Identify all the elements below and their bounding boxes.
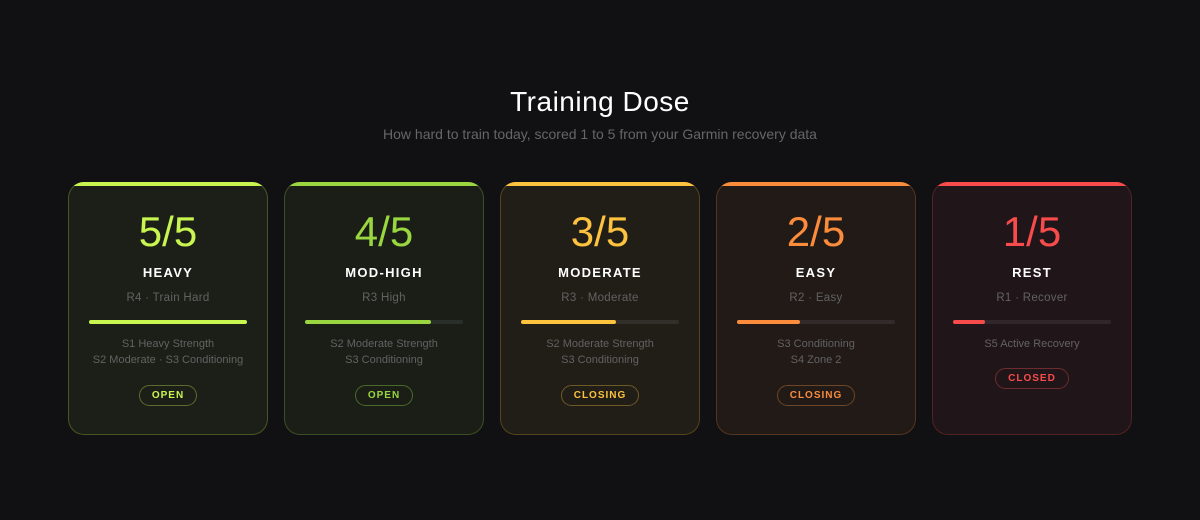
level: moderate: MODERATE bbox=[558, 265, 642, 280]
status pill: closing: CLOSING bbox=[790, 390, 842, 401]
accent bar: easy bbox=[716, 182, 916, 186]
panel: 1/5 rest bbox=[932, 182, 1132, 435]
subtitle: How hard to train today, scored 1 to 5 from your Garmin recovery data bbox=[383, 126, 817, 142]
status pill: closing: CLOSING bbox=[574, 390, 626, 401]
progress bar: 40% bbox=[737, 320, 895, 324]
score: 4/5: 4/5 bbox=[355, 208, 413, 255]
accent bar: heavy bbox=[68, 182, 268, 186]
score: 1/5: 1/5 bbox=[1003, 208, 1061, 255]
sessions: mod-high: S3 Conditioning bbox=[345, 354, 423, 366]
progress bar: 20% bbox=[953, 320, 1111, 324]
level: mod-high: MOD-HIGH bbox=[345, 265, 423, 280]
sessions: moderate bbox=[546, 338, 654, 366]
sessions: heavy: S1 Heavy Strength bbox=[122, 338, 214, 350]
score: 2/5: 2/5 bbox=[787, 208, 845, 255]
status pill: closing bbox=[561, 385, 639, 406]
status pill: closing bbox=[777, 385, 855, 406]
sessions: mod-high bbox=[330, 338, 438, 366]
level: heavy: HEAVY bbox=[143, 265, 193, 280]
recovery label: R1: R1 · Recover bbox=[996, 292, 1068, 304]
level: easy: EASY bbox=[796, 265, 836, 280]
progress bar: 60% bbox=[521, 320, 679, 324]
sessions: easy bbox=[777, 338, 855, 366]
sessions: mod-high: S2 Moderate Strength bbox=[330, 338, 438, 350]
progress bar: 80% bbox=[305, 320, 463, 324]
accent bar: moderate bbox=[500, 182, 700, 186]
progress bar: 100% bbox=[89, 320, 247, 324]
status pill: closed bbox=[995, 368, 1069, 389]
status pill: open: OPEN bbox=[152, 390, 184, 401]
score: 5/5: 5/5 bbox=[139, 208, 197, 255]
score: 3/5: 3/5 bbox=[571, 208, 629, 255]
recovery label: R4: R4 · Train Hard bbox=[126, 292, 210, 304]
sessions: easy: S3 Conditioning bbox=[777, 338, 855, 350]
title: Training Dose bbox=[510, 86, 690, 117]
sessions: easy: S4 Zone 2 bbox=[791, 354, 841, 366]
panel: 2/5 easy bbox=[716, 182, 916, 435]
panel: 5/5 heavy bbox=[68, 182, 268, 435]
recovery label: R3 moderate: R3 · Moderate bbox=[561, 292, 639, 304]
recovery label: R3 high: R3 High bbox=[362, 292, 406, 304]
level: rest: REST bbox=[1012, 265, 1052, 280]
accent bar: rest bbox=[932, 182, 1132, 186]
accent bar: mod-high bbox=[284, 182, 484, 186]
sessions: moderate: S2 Moderate Strength bbox=[546, 338, 654, 350]
panel: 3/5 moderate bbox=[500, 182, 700, 435]
status pill: closed: CLOSED bbox=[1008, 373, 1056, 384]
status pill: open: OPEN bbox=[368, 390, 400, 401]
panel: 4/5 mod-high bbox=[284, 182, 484, 435]
recovery label: R2: R2 · Easy bbox=[789, 292, 843, 304]
sessions: heavy bbox=[93, 338, 243, 366]
status pill: open bbox=[139, 385, 197, 406]
sessions: rest: S5 Active Recovery bbox=[984, 338, 1080, 350]
sessions: moderate: S3 Conditioning bbox=[561, 354, 639, 366]
status pill: open bbox=[355, 385, 413, 406]
sessions: heavy: S2 Moderate · S3 Conditioning bbox=[93, 354, 243, 366]
